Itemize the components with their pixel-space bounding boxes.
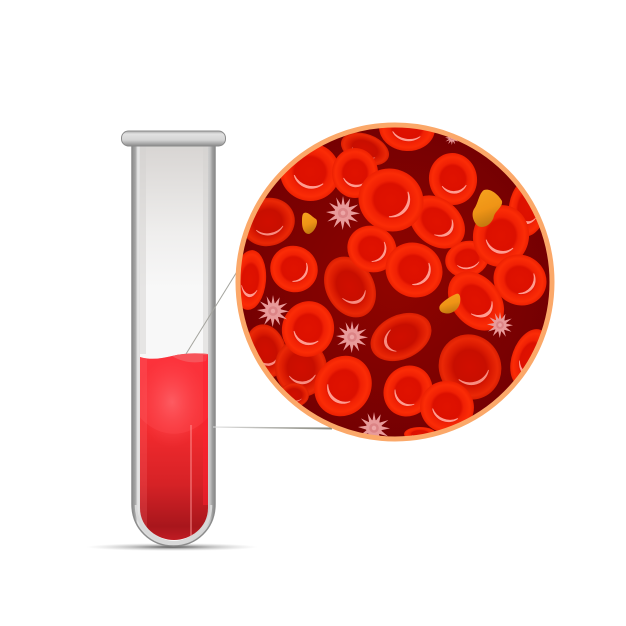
- dim cells behind: [247, 132, 540, 406]
- tube ground shadow: [86, 543, 258, 551]
- infographic: blood test tube with magnified view: [96, 122, 554, 550]
- blood meniscus: [172, 353, 208, 362]
- tube bottom highlight: [136, 505, 211, 543]
- bright cells: [240, 128, 546, 436]
- platelet small: [302, 213, 317, 234]
- blood reflection: [190, 425, 192, 540]
- tube interior: [140, 146, 208, 541]
- tube outer outline: [132, 144, 215, 546]
- white blood cells: [257, 131, 513, 444]
- blood side shade: [140, 355, 147, 540]
- tube glass wall: [132, 144, 215, 546]
- orange ring: [238, 125, 552, 439]
- blood upper band: [140, 353, 208, 432]
- lens background: [238, 125, 552, 439]
- tube inner shading: [140, 146, 208, 354]
- tube rim: [122, 131, 226, 146]
- blood cells: [240, 128, 546, 436]
- platelets: [302, 190, 502, 314]
- platelet large: [473, 190, 502, 227]
- callout line: upper leader: [186, 270, 238, 354]
- callout line: lower leader: [213, 426, 332, 430]
- platelet medium: [439, 294, 460, 314]
- blood liquid: [138, 350, 210, 542]
- magnified circle: [231, 103, 557, 444]
- test tube: [122, 131, 226, 546]
- blood glow: [150, 370, 195, 438]
